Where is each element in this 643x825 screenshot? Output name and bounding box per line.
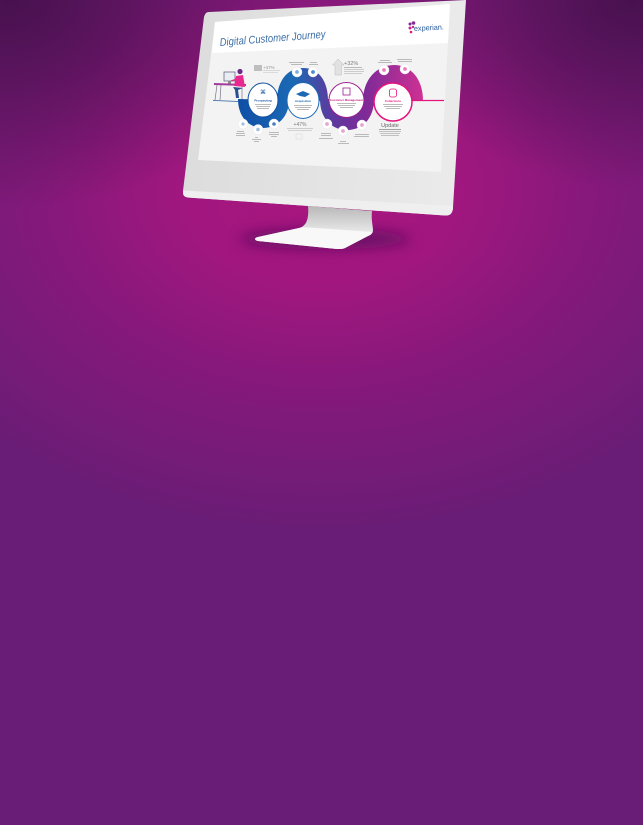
computer screen: [224, 72, 235, 81]
ribbon: [238, 65, 444, 130]
title: Digital Customer Journey: [219, 29, 327, 49]
stat: +47% acquisition: [287, 122, 313, 139]
step: Prospecting: Prospecting: [254, 98, 272, 102]
step: Acquisition: Acquisition: [295, 99, 311, 103]
desk: [214, 83, 246, 86]
screen: [198, 4, 450, 172]
stat: Update: Update: [381, 123, 399, 129]
step: Prospecting: [248, 83, 278, 117]
stat: +32%: +32%: [344, 61, 358, 67]
step: Collections: [374, 83, 412, 121]
logo: experian: experian.: [414, 22, 444, 33]
stat: +32%: [332, 59, 364, 75]
monitor body: [183, 0, 466, 216]
floor line: [213, 100, 240, 102]
step: Prospecting: ⌘: [260, 89, 266, 96]
monitor stand shadow: [239, 229, 411, 249]
tiny labels: [236, 59, 412, 144]
screen header band: [212, 4, 450, 53]
illustration: person at desk: [213, 69, 246, 102]
stat: +47% acquisition: +47%: [294, 122, 307, 128]
monitor stand: [255, 206, 373, 249]
stat: top left: [254, 65, 280, 73]
small icon glyphs: [241, 67, 407, 133]
person: [237, 69, 243, 74]
step: Customer Management: [329, 82, 364, 118]
step: Acquisition: [287, 82, 319, 118]
step: Collections: Collections: [385, 99, 401, 103]
stat: top left: +47%: [263, 65, 275, 70]
pink end line: [412, 100, 444, 102]
step: Customer Management: Customer Management: [330, 98, 363, 102]
stat: Update: [379, 123, 401, 136]
small icon discs: [238, 64, 410, 136]
